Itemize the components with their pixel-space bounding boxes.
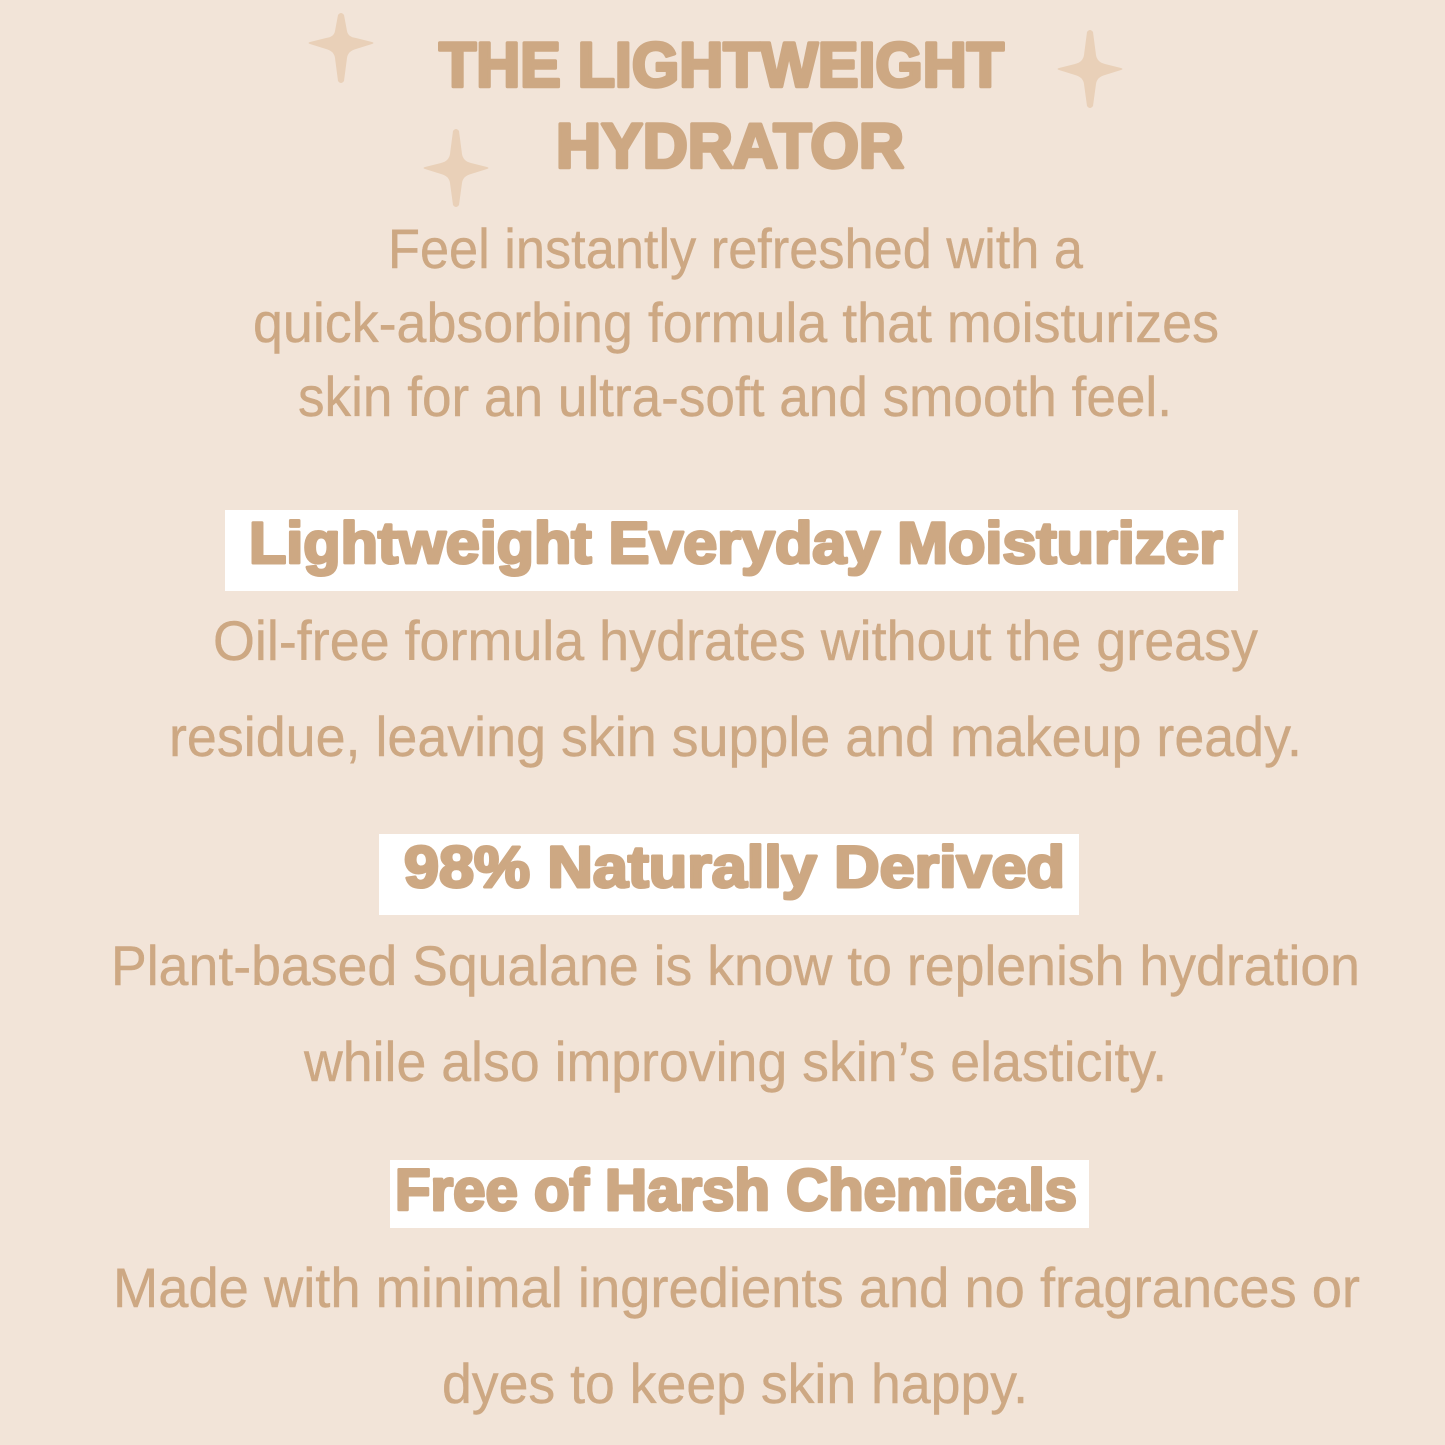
description: Plant-based Squalane is know to replenish hydration (111, 934, 1360, 997)
intro text (253, 217, 1219, 428)
description (169, 609, 1302, 768)
intro text: quick-absorbing formula that moisturizes (253, 291, 1219, 354)
title: THE LIGHTWEIGHT (439, 30, 1004, 100)
heading: Lightweight Everyday Moisturizer (249, 511, 1223, 576)
heading highlight box (379, 834, 1079, 915)
description (111, 934, 1360, 1093)
panel: lightweight everyday moisturizer (169, 510, 1302, 768)
heading highlight box (390, 1160, 1089, 1228)
heading: 98% Naturally Derived (404, 835, 1065, 900)
icon: sparkle top left (308, 13, 374, 83)
panel: 98% naturally derived (111, 834, 1360, 1093)
description (113, 1256, 1360, 1415)
description: residue, leaving skin supple and makeup ready. (169, 705, 1302, 768)
description: dyes to keep skin happy. (442, 1352, 1028, 1415)
intro text: Feel instantly refreshed with a (388, 217, 1084, 280)
title (439, 30, 1004, 182)
intro text: skin for an ultra-soft and smooth feel. (298, 365, 1172, 428)
heading: Free of Harsh Chemicals (395, 1158, 1077, 1223)
title: HYDRATOR (556, 112, 904, 182)
panel: free of harsh chemicals (113, 1158, 1360, 1415)
icon: sparkle lower left (424, 129, 488, 207)
description: Oil-free formula hydrates without the greasy (213, 609, 1258, 672)
icon: sparkle top right (1058, 30, 1122, 108)
heading highlight box (225, 510, 1238, 591)
description: Made with minimal ingredients and no fragrances or (113, 1256, 1360, 1319)
description: while also improving skin’s elasticity. (303, 1030, 1167, 1093)
